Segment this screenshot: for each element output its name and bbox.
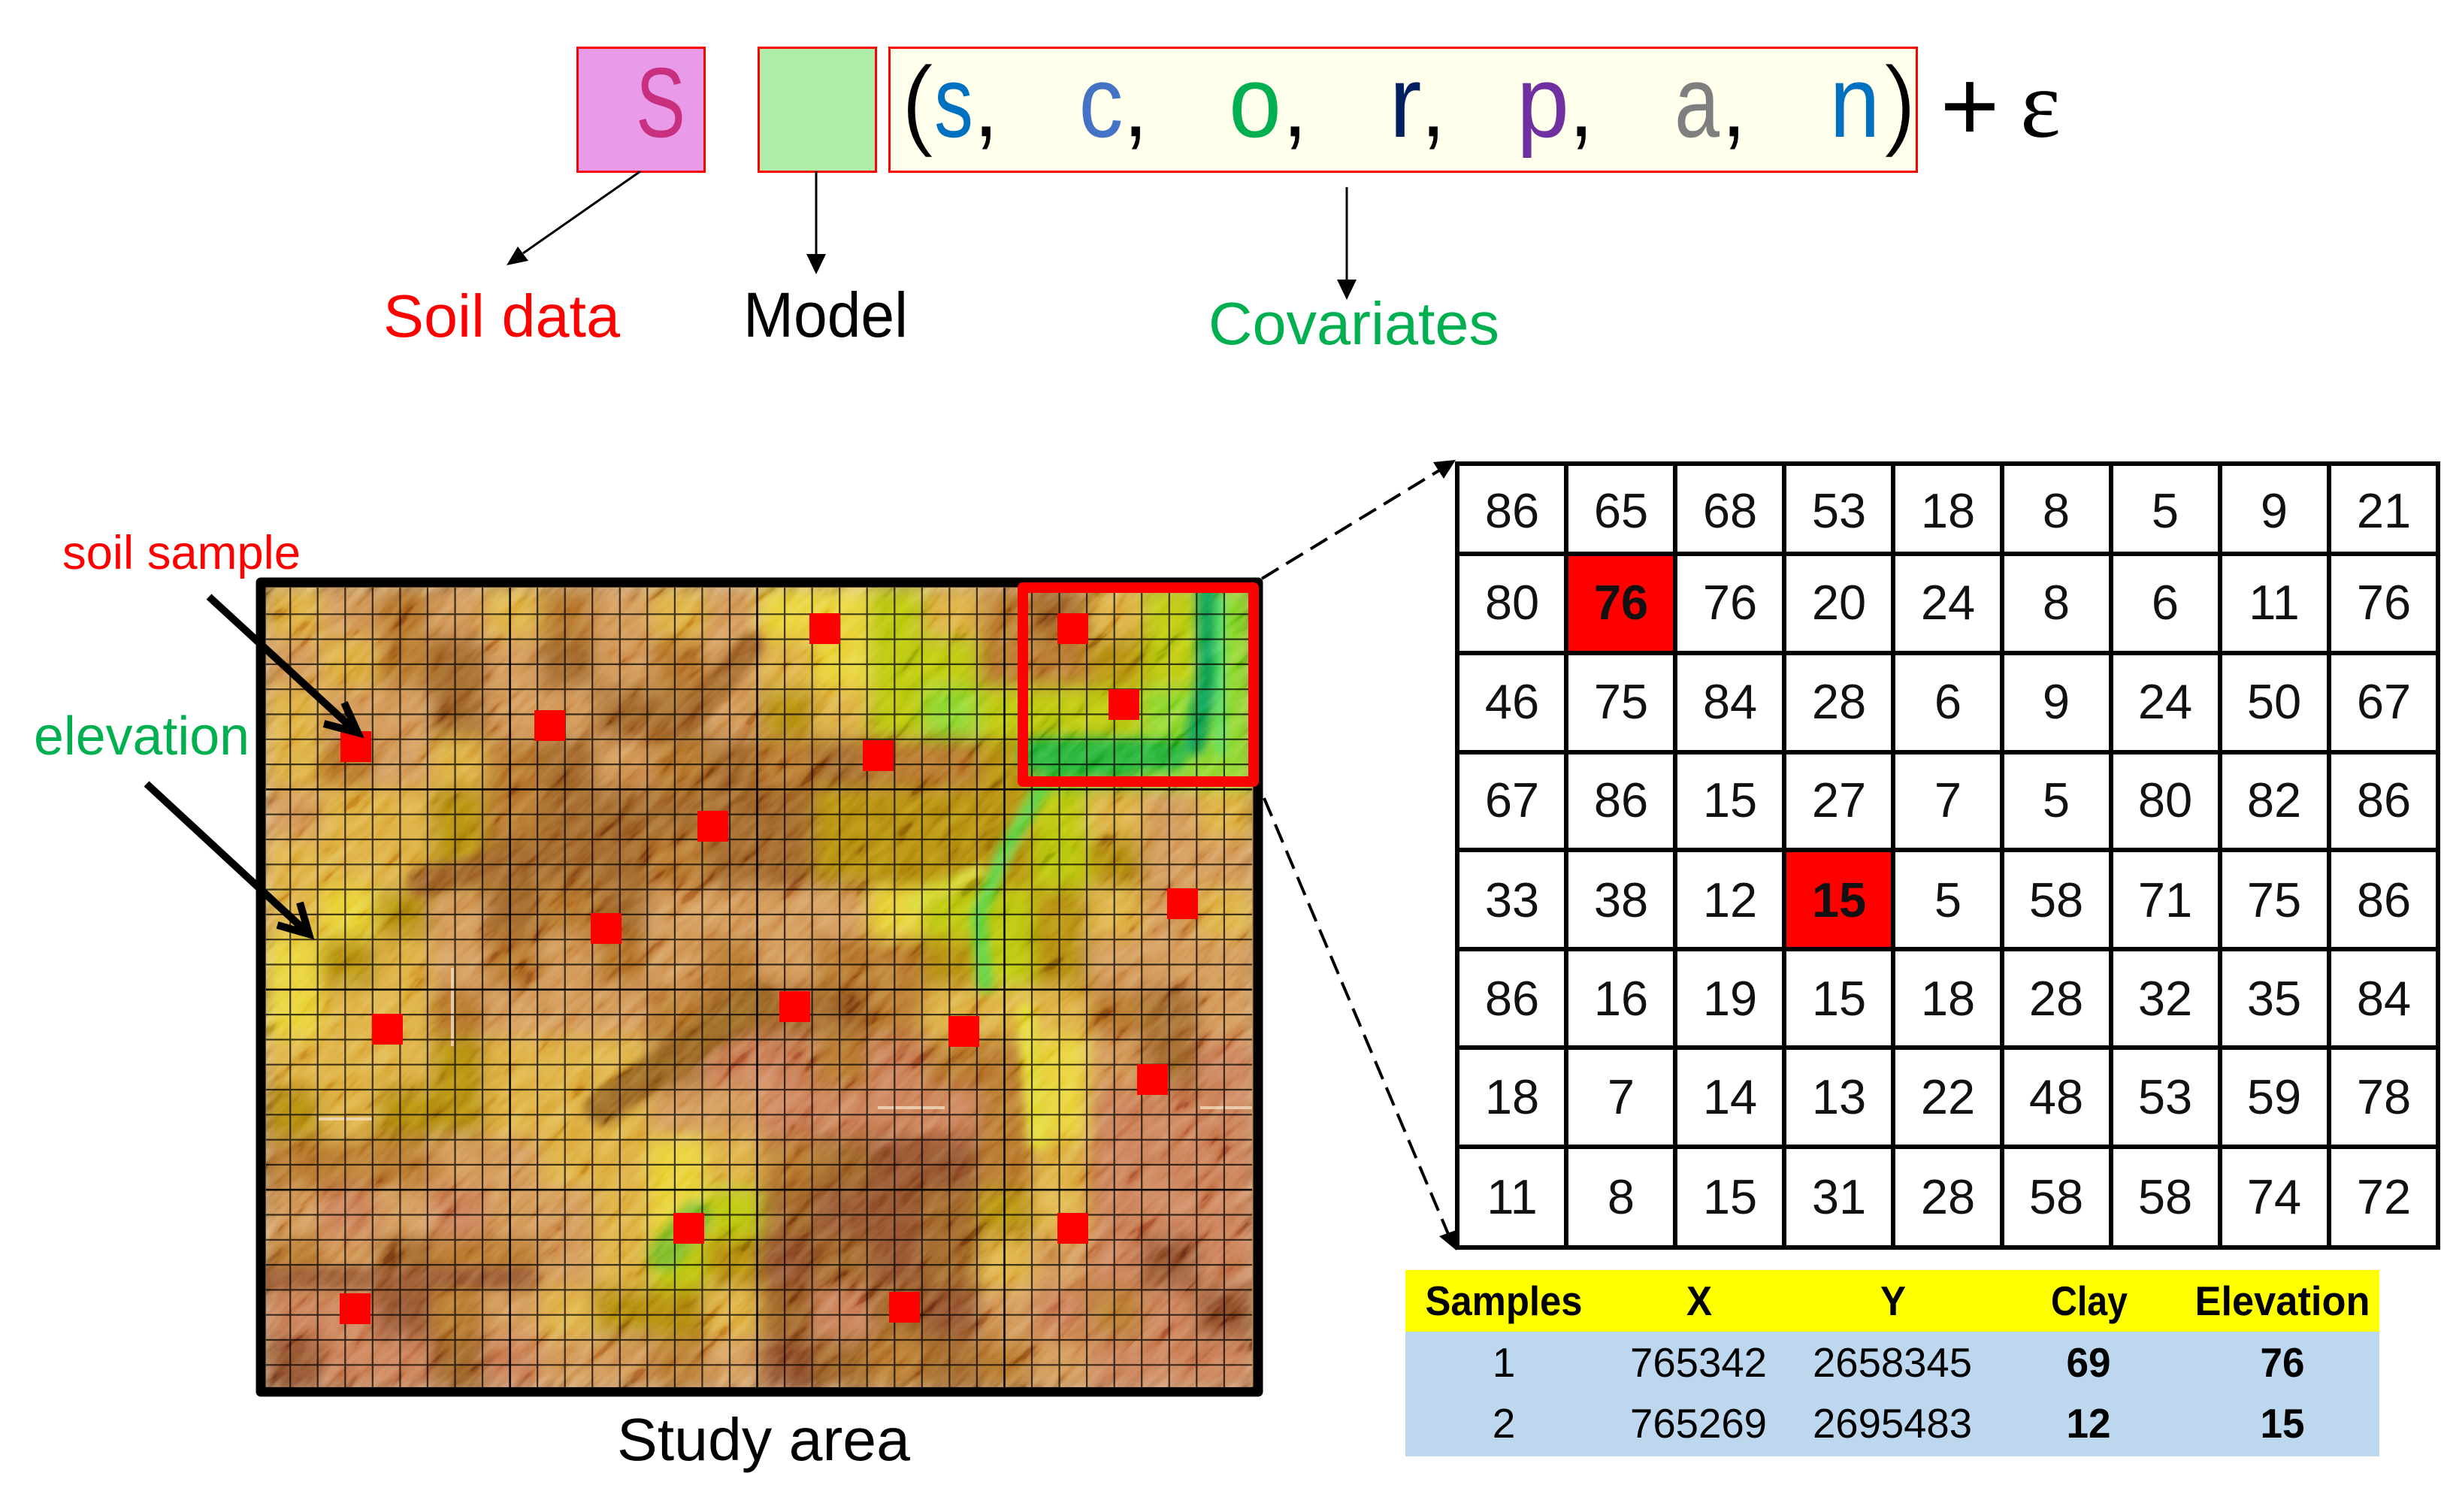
- label: covariates: Covariates: [1208, 290, 1499, 357]
- table values: 86: [1485, 483, 1539, 538]
- table values: 46: [1485, 674, 1539, 729]
- dashed connector top: [1262, 460, 1456, 579]
- sample row 1: 1: [1493, 1339, 1515, 1386]
- table values: 7: [1608, 1069, 1635, 1124]
- table values: 13: [1812, 1069, 1866, 1124]
- sample row 2: 15: [2261, 1400, 2304, 1447]
- arrow: box to model: [806, 171, 826, 274]
- table values: 7: [1934, 773, 1962, 827]
- label: soil data: Soil data: [383, 283, 621, 349]
- table values: 53: [1812, 483, 1866, 538]
- table values: 9: [2261, 483, 2288, 538]
- table values: 86: [1594, 773, 1648, 827]
- plus error term: ε: [2020, 51, 2061, 158]
- label: soil sample: soil sample: [62, 527, 301, 579]
- red zoom box: [1023, 588, 1254, 782]
- arrow: elevation: [147, 784, 309, 934]
- table values: 22: [1921, 1069, 1975, 1124]
- table values: 18: [1921, 971, 1975, 1026]
- table values: 31: [1812, 1169, 1866, 1224]
- table values: 71: [2138, 872, 2192, 927]
- soil data box S: S: [636, 47, 685, 158]
- covariates box with scorpan terms: a: [1674, 45, 1720, 159]
- covariates box with scorpan terms: r: [1389, 45, 1422, 159]
- table values: [1485, 483, 2411, 1224]
- samples table header: Clay: [2051, 1278, 2128, 1324]
- table values: 15: [1703, 773, 1757, 827]
- map frame: [261, 582, 1258, 1392]
- sample row 2: 2695483: [1813, 1400, 1972, 1447]
- table values: 53: [2138, 1069, 2192, 1124]
- samples table body: [1405, 1332, 2379, 1456]
- table values: 12: [1703, 872, 1757, 927]
- table values: 48: [2029, 1069, 2083, 1124]
- table values: 72: [2357, 1169, 2411, 1224]
- highlighted cell 15: [1784, 850, 1893, 949]
- table values: 84: [2357, 971, 2411, 1026]
- table values: 82: [2247, 773, 2301, 827]
- arrow: box to covariates: [1337, 187, 1357, 300]
- sample row 2: 765269: [1630, 1400, 1767, 1447]
- texture: [266, 588, 1252, 1387]
- table values: 9: [2043, 674, 2070, 729]
- study area map: [261, 582, 1258, 1392]
- samples table: [1405, 1270, 2379, 1456]
- table values: 67: [1485, 773, 1539, 827]
- sample row 1: 76: [2261, 1339, 2304, 1386]
- table values: 58: [2029, 1169, 2083, 1224]
- table values: 58: [2029, 872, 2083, 927]
- table values: 8: [2043, 483, 2070, 538]
- covariates box with scorpan terms: n: [1829, 45, 1880, 159]
- table values: 28: [2029, 971, 2083, 1026]
- table values: 68: [1703, 483, 1757, 538]
- covariates box with scorpan terms: ,: [1720, 45, 1748, 159]
- samples table header: [1405, 1270, 2379, 1332]
- pixel grid: [266, 588, 1252, 1387]
- table values: 86: [2357, 872, 2411, 927]
- covariates box with scorpan terms: (: [901, 45, 935, 159]
- samples table header: Elevation: [2194, 1278, 2370, 1324]
- table values: 5: [2152, 483, 2179, 538]
- table values: 21: [2357, 483, 2411, 538]
- table values: 35: [2247, 971, 2301, 1026]
- covariates box with scorpan terms: ,: [972, 45, 1000, 159]
- arrow: S to soil data: [507, 171, 640, 265]
- table values: 18: [1921, 483, 1975, 538]
- soil sample points: [340, 613, 1198, 1324]
- covariates box with scorpan terms: ,: [1281, 45, 1309, 159]
- covariates box with scorpan terms: o: [1229, 45, 1281, 159]
- highlighted cell 76: [1566, 554, 1675, 653]
- raster value table: [1455, 461, 2440, 1250]
- table values: 78: [2357, 1069, 2411, 1124]
- covariates box with scorpan terms: ): [1883, 45, 1916, 159]
- table values: 86: [2357, 773, 2411, 827]
- table values: 15: [1812, 872, 1866, 927]
- table values: 76: [1594, 575, 1648, 630]
- table values: 15: [1703, 1169, 1757, 1224]
- sample row 2: 2: [1493, 1400, 1515, 1447]
- samples table header: Y: [1880, 1278, 1906, 1324]
- table values: 6: [1934, 674, 1962, 729]
- pale road lines: [319, 968, 1252, 1119]
- table values: 58: [2138, 1169, 2192, 1224]
- covariates box with scorpan terms: ,: [1121, 45, 1150, 159]
- samples table header: Samples: [1425, 1278, 1583, 1324]
- table values: 32: [2138, 971, 2192, 1026]
- table values: 59: [2247, 1069, 2301, 1124]
- table values: 18: [1485, 1069, 1539, 1124]
- table values: 80: [1485, 575, 1539, 630]
- table values: 50: [2247, 674, 2301, 729]
- table values: 33: [1485, 872, 1539, 927]
- table values: 76: [1703, 575, 1757, 630]
- table values: 76: [2357, 575, 2411, 630]
- table values: 24: [2138, 674, 2192, 729]
- table values: 27: [1812, 773, 1866, 827]
- table values: 14: [1703, 1069, 1757, 1124]
- table values: 75: [1594, 674, 1648, 729]
- table values: 11: [2249, 575, 2300, 630]
- table values: 5: [2043, 773, 2070, 827]
- sample row 1: 765342: [1630, 1339, 1767, 1386]
- table values: 8: [2043, 575, 2070, 630]
- covariates box with scorpan terms: [890, 45, 1916, 171]
- table values: 67: [2357, 674, 2411, 729]
- table values: 28: [1921, 1169, 1975, 1224]
- table values: 19: [1703, 971, 1757, 1026]
- plus error term: +: [1940, 49, 1999, 162]
- covariates box with scorpan terms: ,: [1419, 45, 1447, 159]
- table values: 65: [1594, 483, 1648, 538]
- covariates box with scorpan terms: s: [934, 45, 973, 159]
- sample row 2: 12: [2067, 1400, 2110, 1447]
- table values: 84: [1703, 674, 1757, 729]
- table values: 8: [1608, 1169, 1635, 1224]
- table values: 15: [1812, 971, 1866, 1026]
- table values: 80: [2138, 773, 2192, 827]
- table grid lines: [1455, 461, 2440, 1250]
- soil data box S: [577, 47, 705, 171]
- label: elevation: elevation: [34, 706, 250, 767]
- table values: 75: [2247, 872, 2301, 927]
- table values: 28: [1812, 674, 1866, 729]
- model box: [759, 48, 876, 171]
- samples table header: X: [1686, 1278, 1712, 1324]
- sample row 2: [1493, 1400, 2304, 1447]
- covariates box with scorpan terms: c: [1079, 45, 1123, 159]
- table values: 38: [1594, 872, 1648, 927]
- covariates box with scorpan terms: ,: [1567, 45, 1596, 159]
- table values: 11: [1487, 1169, 1538, 1224]
- plus error term: [1940, 49, 2061, 162]
- sample row 1: 69: [2067, 1339, 2110, 1386]
- table values: 86: [1485, 971, 1539, 1026]
- elevation terrain raster: [266, 588, 1254, 1389]
- covariates box with scorpan terms: p: [1517, 45, 1569, 159]
- rivers and valleys: [266, 588, 1220, 1278]
- label: model: Model: [743, 280, 908, 350]
- table values: 16: [1594, 971, 1648, 1026]
- table values: 24: [1921, 575, 1975, 630]
- table values: 5: [1934, 872, 1962, 927]
- sample row 1: [1493, 1339, 2304, 1386]
- table values: 74: [2247, 1169, 2301, 1224]
- equation panel: [577, 45, 2061, 171]
- arrow: soil sample: [209, 597, 358, 733]
- table values: 20: [1812, 575, 1866, 630]
- table values: 6: [2152, 575, 2179, 630]
- sample row 1: 2658345: [1813, 1339, 1972, 1386]
- dashed connector bottom: [1264, 798, 1458, 1250]
- label: study area: Study area: [617, 1406, 911, 1473]
